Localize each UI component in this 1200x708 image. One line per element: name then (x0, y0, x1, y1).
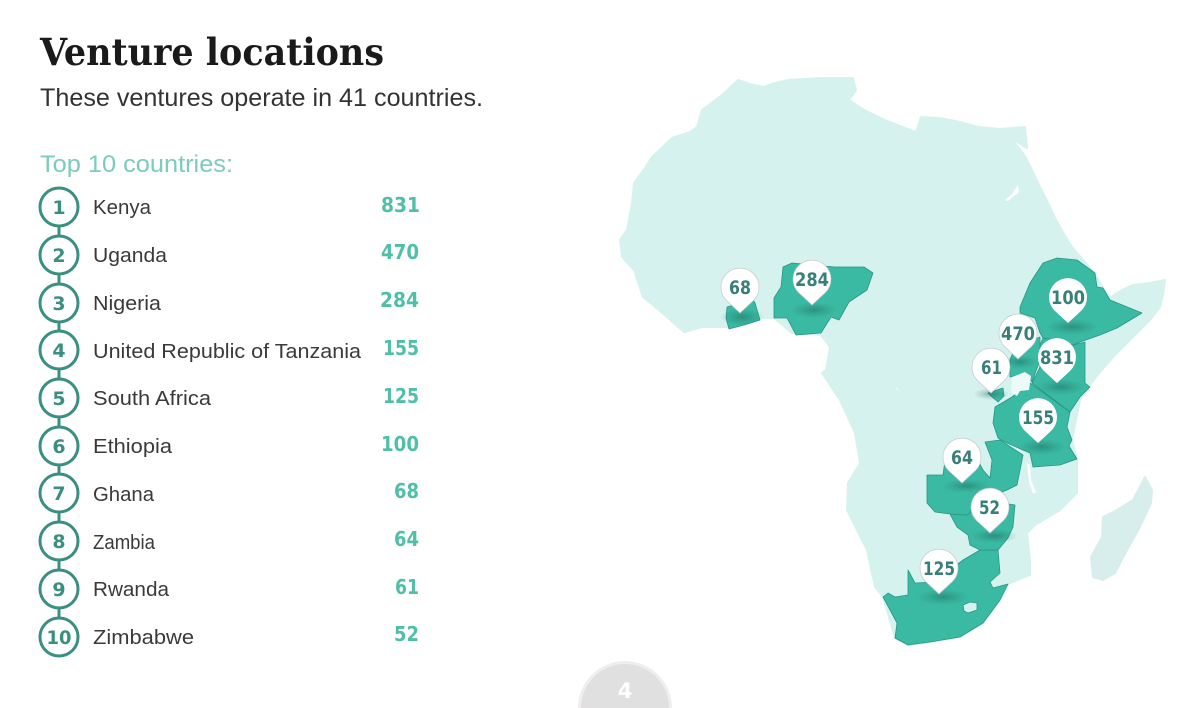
pin 470 (999, 314, 1037, 359)
Ghana (726, 300, 760, 329)
row 4: Tanzania: 4 (52, 340, 66, 362)
Zambia (927, 440, 1023, 515)
pin 284 (793, 260, 831, 305)
row 1: Kenya (40, 188, 420, 226)
map of Africa (620, 78, 1165, 645)
row 6: Ethiopia: 6 (52, 436, 66, 458)
row 5: South Africa (40, 379, 419, 417)
row 3: Nigeria (40, 284, 419, 322)
Kenya (1032, 338, 1090, 412)
pin 68: 68 (729, 278, 751, 299)
inland water details (895, 185, 1036, 494)
row 1: Kenya: 1 (52, 197, 66, 219)
pin 68 (721, 268, 759, 313)
pin 155: 155 (1022, 408, 1054, 429)
row 3: Nigeria: 3 (52, 293, 66, 315)
pin 831: 831 (1040, 348, 1074, 369)
row 4: Tanzania (40, 331, 419, 369)
row 2: Uganda: 2 (52, 245, 66, 267)
row 4: Tanzania: 155 (383, 336, 419, 360)
row 1: Kenya: 831 (381, 193, 420, 217)
continent base (620, 78, 1165, 645)
row 7: Ghana: Ghana (93, 483, 155, 506)
row 1: Kenya: Kenya (93, 196, 152, 219)
pin 155 (1019, 398, 1057, 443)
row 7: Ghana: 7 (52, 483, 66, 505)
row 3: Nigeria: Nigeria (93, 292, 162, 315)
row 10: Zimbabwe: 52 (394, 622, 419, 646)
row 9: Rwanda (40, 570, 419, 608)
page number badge: 4 (618, 679, 632, 703)
list heading: Top 10 countries: (40, 151, 233, 178)
row 8: Zambia (40, 522, 419, 560)
row 8: Zambia: 64 (394, 527, 419, 551)
pin 61: 61 (981, 358, 1002, 379)
page number badge (578, 661, 672, 708)
Nigeria (774, 263, 873, 335)
pin shadows (720, 302, 1098, 605)
row 4: Tanzania: United Republic of Tanzania (93, 340, 362, 363)
pin 100: 100 (1051, 288, 1085, 309)
row 2: Uganda: Uganda (93, 244, 168, 267)
row 3: Nigeria: 284 (380, 288, 419, 312)
Ethiopia (1020, 258, 1142, 345)
rank connector line (58, 207, 60, 637)
Lake Victoria (1011, 372, 1031, 396)
pin 64: 64 (951, 448, 973, 469)
row 9: Rwanda: 61 (395, 575, 419, 599)
row 10: Zimbabwe: 10 (46, 627, 72, 649)
South Africa (883, 550, 1008, 645)
row 8: Zambia: 8 (52, 531, 66, 553)
row 7: Ghana: 68 (394, 479, 419, 503)
pin 100 (1049, 278, 1087, 323)
pin 52: 52 (979, 498, 1000, 519)
pin 284: 284 (795, 270, 829, 291)
row 6: Ethiopia: Ethiopia (93, 435, 173, 458)
ranked list: top 10 countries (40, 188, 420, 656)
row 9: Rwanda: Rwanda (93, 578, 170, 601)
Rwanda (988, 388, 1004, 402)
row 7: Ghana (40, 474, 419, 512)
row 5: South Africa: South Africa (93, 387, 212, 410)
row 10: Zimbabwe: Zimbabwe (93, 626, 194, 649)
pin 64 (943, 438, 981, 483)
Zimbabwe (950, 500, 1015, 550)
row 6: Ethiopia: 100 (381, 432, 419, 456)
row 9: Rwanda: 9 (52, 579, 66, 601)
pin 831 (1038, 338, 1076, 383)
row 2: Uganda (40, 236, 419, 274)
Madagascar (1091, 477, 1152, 580)
row 10: Zimbabwe (40, 618, 419, 656)
Uganda (1010, 337, 1040, 382)
pin 52 (971, 488, 1009, 533)
pin 125: 125 (923, 559, 955, 580)
Tanzania (993, 383, 1077, 467)
pin 470: 470 (1001, 324, 1035, 345)
map pins (720, 260, 1098, 605)
row 2: Uganda: 470 (381, 240, 419, 264)
subtitle: These ventures operate in 41 countries. (40, 84, 483, 112)
pin 61 (972, 348, 1010, 393)
row 6: Ethiopia (40, 427, 419, 465)
pin 125 (920, 549, 958, 594)
row 5: South Africa: 125 (383, 384, 419, 408)
row 8: Zambia: Zambia (93, 531, 156, 554)
title: Venture locations (39, 30, 384, 74)
row 5: South Africa: 5 (52, 388, 66, 410)
